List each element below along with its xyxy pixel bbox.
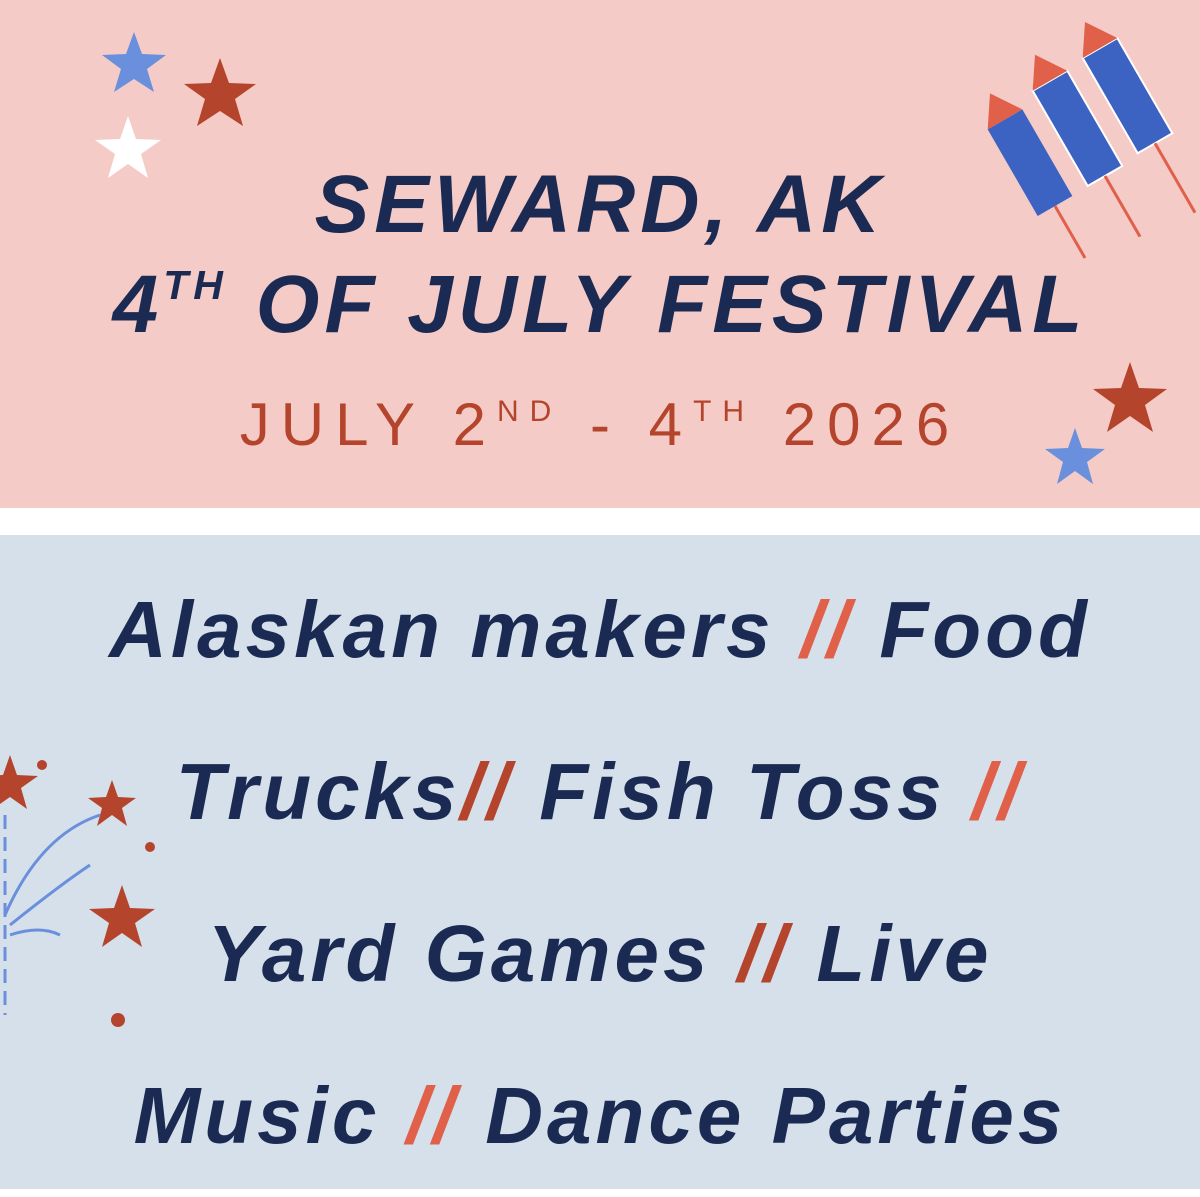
activities text: Music // Dance Parties <box>134 1071 1066 1160</box>
activities text: Alaskan makers // Food <box>109 585 1091 674</box>
icon: fireworks left <box>0 755 155 1027</box>
activities text: Yard Games // Live <box>208 909 992 998</box>
title: SEWARD, AK <box>315 159 885 250</box>
title <box>111 159 1087 350</box>
icon: stars right <box>1045 362 1167 484</box>
date: JULY 2ND - 4TH 2026 <box>240 391 960 458</box>
title: 4TH OF JULY FESTIVAL <box>113 259 1087 350</box>
icon: rockets <box>988 22 1196 259</box>
panel: header <box>0 0 1200 508</box>
activities text: Trucks// Fish Toss // <box>176 747 1024 836</box>
icon: stars top left <box>95 32 256 178</box>
activities text <box>108 585 1091 1160</box>
panel: activities <box>0 535 1200 1189</box>
